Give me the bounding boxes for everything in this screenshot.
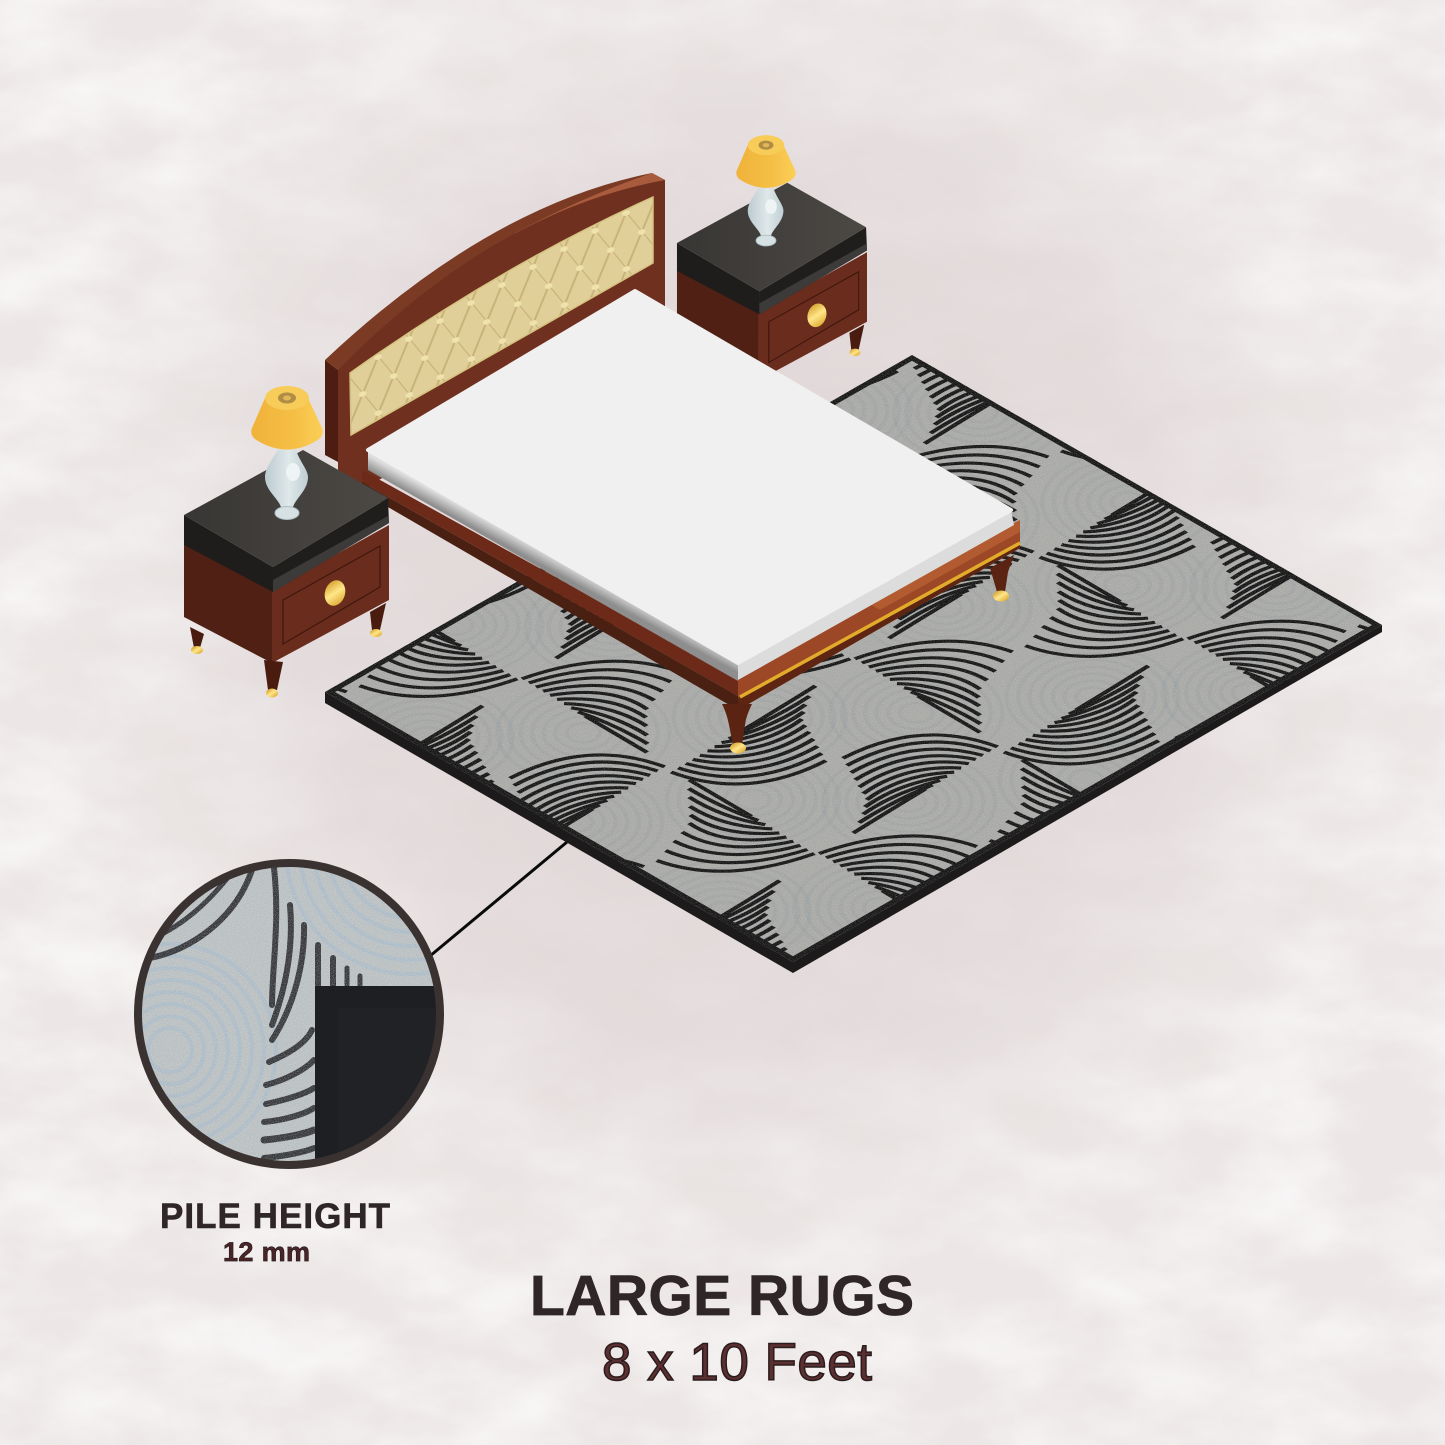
rug [325, 355, 1382, 973]
dark stripes [150, 868, 360, 1158]
striped fans: bulge-down, tip right [188, 296, 1402, 1006]
striped fans: bulge-up, tip right [189, 327, 1398, 1035]
circle detail: pile close-up [134, 859, 444, 1169]
swirl fibres [142, 867, 430, 1144]
mattress [368, 291, 1014, 681]
rug surface pattern [325, 355, 1382, 962]
fabric grain [137, 862, 441, 1166]
bed [325, 173, 1020, 754]
swirl pattern [134, 135, 1374, 1169]
title: 8 x 10 Feet [602, 1333, 872, 1392]
left nightstand [184, 450, 389, 698]
pile height label [160, 1197, 390, 1267]
striped fans: bulge-down, tip left [307, 283, 1445, 991]
right nightstand [677, 183, 867, 412]
title [530, 1264, 914, 1392]
pile height label: PILE HEIGHT [160, 1197, 390, 1236]
bed legs [722, 555, 1014, 754]
striped fans: bulge-up, tip left [303, 318, 1445, 1028]
headboard [325, 173, 665, 490]
rug thickness edge [325, 625, 1382, 973]
pile height label: 12 mm [223, 1237, 310, 1267]
bed rails [362, 470, 1020, 710]
rug back corner [315, 986, 436, 1159]
left lamp [251, 386, 323, 520]
title: LARGE RUGS [530, 1264, 914, 1328]
right lamp [736, 135, 796, 246]
rug fibre texture [325, 355, 1382, 962]
callout leader line [430, 842, 567, 956]
